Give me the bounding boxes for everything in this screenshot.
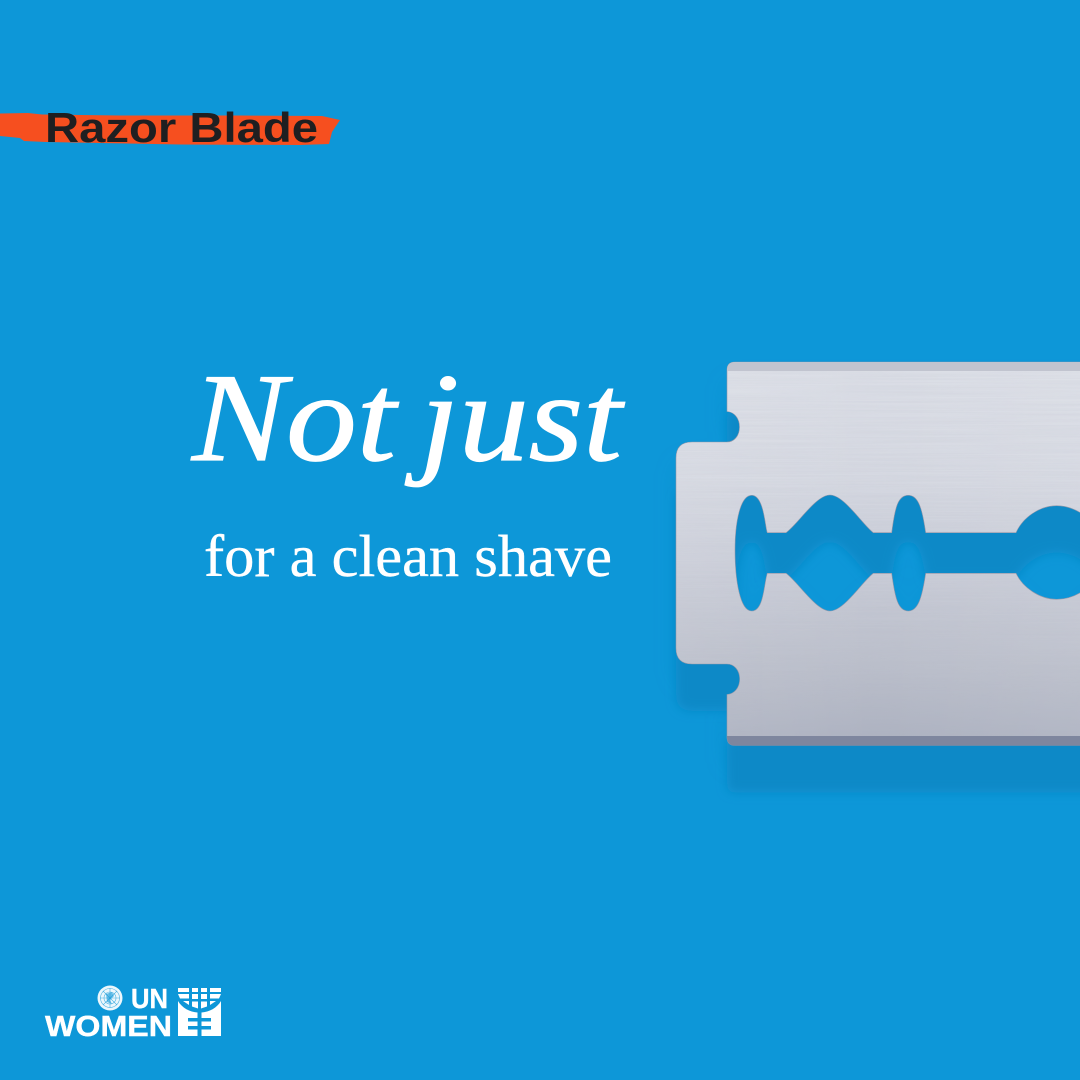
logo text: UN: UN: [131, 983, 168, 1014]
tag: Razor Blade: [0, 104, 340, 151]
blade body: [676, 362, 1080, 746]
top bevel: [727, 362, 1080, 371]
orange brush stroke: [0, 113, 340, 145]
bottom bevel: [727, 736, 1080, 746]
subheading: for a clean shave: for a clean shave: [204, 523, 612, 589]
razor blade illustration: [676, 362, 1080, 792]
outer blade shadow: [676, 382, 1080, 766]
logo text: WOMEN: WOMEN: [45, 1011, 172, 1043]
heading: Not just: [191, 349, 625, 488]
icon: UN Women emblem: [178, 988, 221, 1036]
tag text: Razor Blade: [45, 104, 318, 151]
blade shadow: [676, 409, 1080, 792]
icon: UN globe emblem: [98, 986, 122, 1010]
heading: Not just: Not: [191, 349, 399, 488]
logo: UN Women: [45, 983, 221, 1043]
heading: Not just: just: [404, 349, 625, 488]
brushed metal texture: [676, 362, 1080, 746]
